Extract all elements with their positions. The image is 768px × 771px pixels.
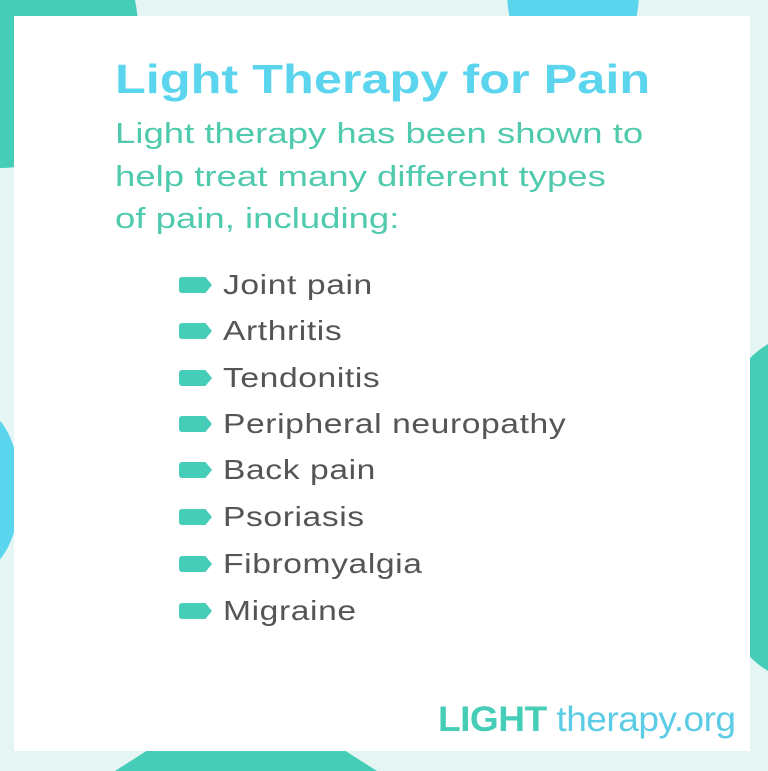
item: Tendonitis: Tendonitis	[223, 362, 380, 393]
item: Back pain: Back pain	[223, 454, 376, 485]
item: Peripheral neuropathy: Peripheral neuropathy	[223, 408, 566, 439]
intro text: of pain, including:	[115, 203, 399, 235]
item: Arthritis: Arthritis	[223, 315, 342, 346]
intro text: help treat many different types	[115, 160, 606, 192]
decoration: left blue shape	[0, 410, 20, 570]
decoration: bottom teal trapezoid	[115, 751, 377, 771]
logo: LIGHT therapy.org	[438, 700, 736, 739]
decoration: top-left teal circle	[0, 0, 138, 168]
title: Light Therapy for Pain	[115, 56, 650, 102]
decoration: right teal shape	[700, 335, 768, 680]
item: Psoriasis: Psoriasis	[223, 501, 365, 532]
item: Migraine: Migraine	[223, 595, 357, 626]
intro text: Light therapy has been shown to	[115, 118, 643, 150]
decoration: top-right blue circle	[507, 0, 639, 90]
item: Fibromyalgia: Fibromyalgia	[223, 548, 423, 579]
item: Joint pain: Joint pain	[223, 269, 373, 300]
intro text	[115, 118, 643, 235]
list of pain types	[179, 269, 566, 626]
